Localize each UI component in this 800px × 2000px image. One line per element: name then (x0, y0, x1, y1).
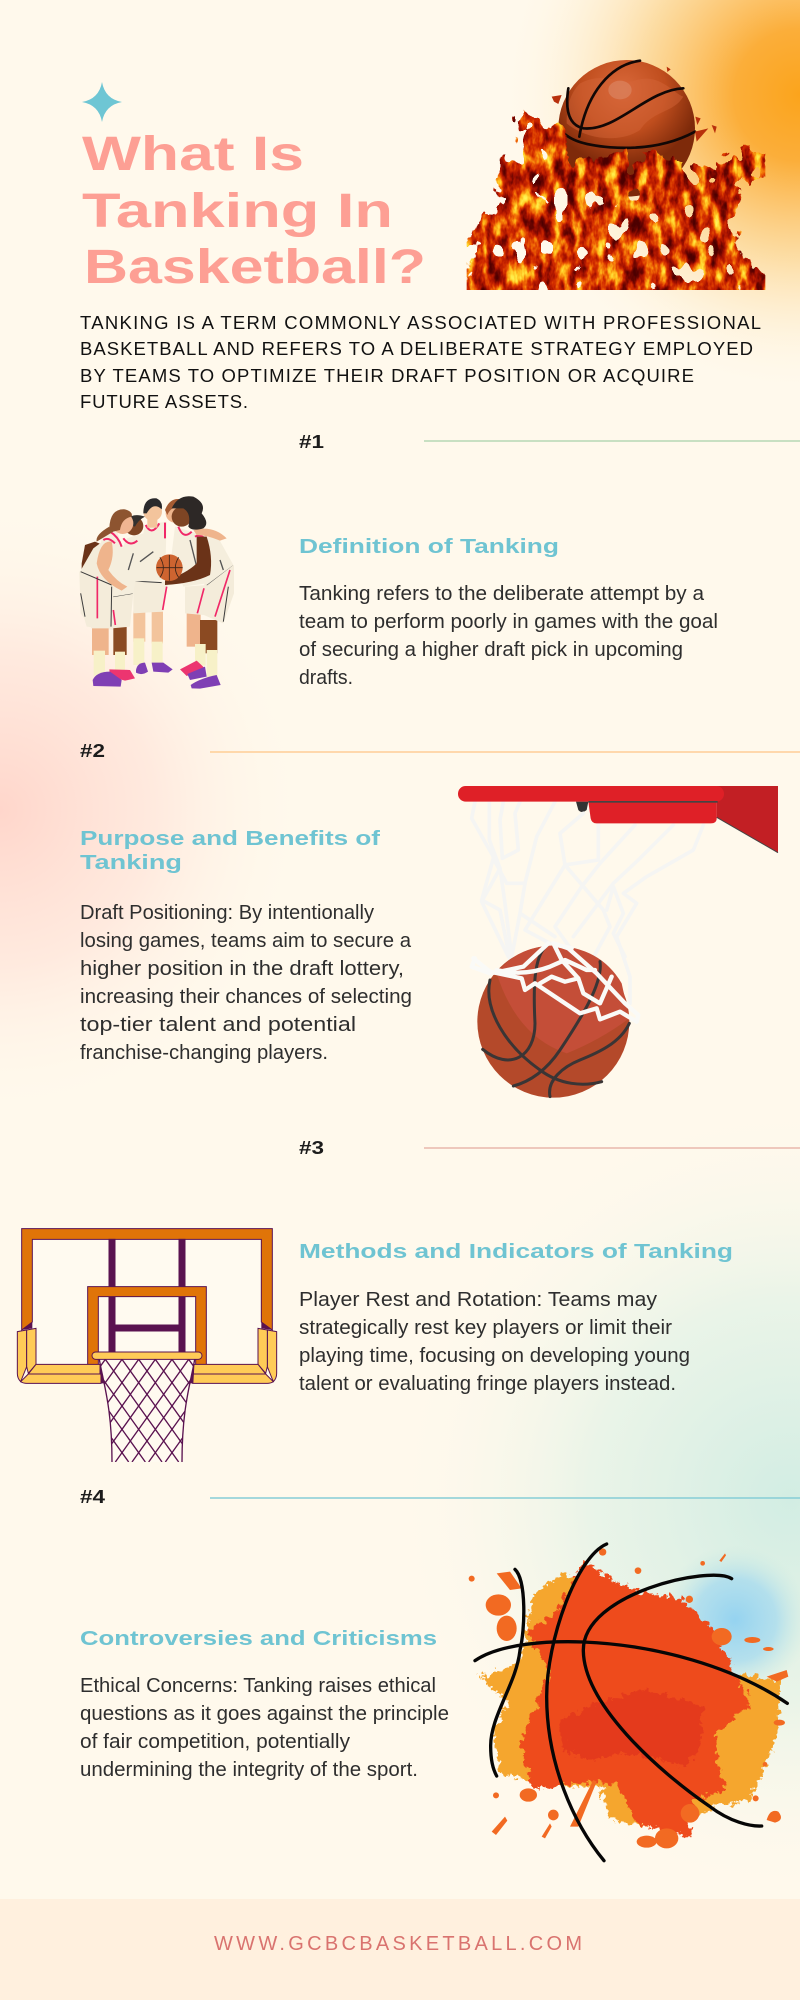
section number 4: #4 (80, 1487, 105, 1507)
icon: sparkle (82, 82, 122, 122)
panel: methods and indicators (17, 1138, 800, 1462)
body text: talent or evaluating fringe players instead. (299, 1373, 676, 1395)
intro paragraph: BASKETBALL AND REFERS TO A DELIBERATE STRATEGY EMPLOYED (80, 338, 753, 359)
panel: controversies and criticisms (80, 1487, 800, 1861)
illustration: backboard and net (17, 1229, 277, 1462)
illustration: ball dropping through hoop (458, 786, 778, 1098)
flames (460, 110, 773, 300)
section number 2: #2 (80, 741, 105, 761)
legs (92, 612, 217, 655)
body text: questions as it goes against the principle (80, 1703, 449, 1725)
body text: playing time, focusing on developing young (299, 1345, 690, 1367)
body text: Draft Positioning: By intentionally (80, 902, 374, 924)
body text (299, 1289, 690, 1395)
body text: Tanking refers to the deliberate attempt by a (299, 583, 705, 605)
orange splatter (520, 1560, 750, 1837)
body text (80, 902, 412, 1064)
illustration: paint splatter basketball (469, 1544, 788, 1861)
dark center (560, 1690, 703, 1767)
heading: Methods and Indicators of Tanking (299, 1241, 733, 1263)
jerseys (97, 522, 233, 597)
body text: Player Rest and Rotation: Teams may (299, 1289, 657, 1311)
seams (475, 1544, 787, 1861)
body text: drafts. (299, 667, 353, 689)
basketball (558, 60, 695, 197)
socks (94, 638, 217, 678)
title: Basketball? (84, 241, 426, 294)
orange blobs (469, 1548, 788, 1848)
body text (299, 583, 718, 689)
panel: purpose and benefits (80, 741, 800, 1098)
section number 3: #3 (299, 1138, 324, 1158)
body text (80, 1675, 449, 1781)
body text: higher position in the draft lottery, (80, 958, 404, 980)
body text: team to perform poorly in games with the goal (299, 611, 718, 633)
footer band (0, 1899, 800, 2000)
arms (97, 542, 127, 591)
frame padding (17, 1328, 277, 1383)
back player arm and body (82, 542, 107, 572)
ball (477, 946, 629, 1098)
heading: Tanking (80, 852, 182, 874)
title (82, 128, 426, 294)
body text: of fair competition, potentially (80, 1731, 350, 1753)
intro paragraph: BY TEAMS TO OPTIMIZE THEIR DRAFT POSITION OR ACQUIRE (80, 365, 694, 386)
body text: losing games, teams aim to secure a (80, 930, 412, 952)
backboard support (576, 786, 778, 853)
title: Tanking In (82, 185, 393, 238)
body text: undermining the integrity of the sport. (80, 1759, 418, 1781)
intro paragraph (80, 312, 761, 412)
title: What Is (82, 128, 304, 181)
panel: definition of tanking (79, 432, 800, 689)
basketball (156, 554, 183, 581)
body text: Ethical Concerns: Tanking raises ethical (80, 1675, 436, 1697)
intro paragraph: FUTURE ASSETS. (80, 391, 248, 412)
heading: Definition of Tanking (299, 536, 559, 558)
shoes (93, 661, 221, 689)
body text: top-tier talent and potential (80, 1014, 356, 1036)
shorts (79, 565, 234, 628)
intro paragraph: TANKING IS A TERM COMMONLY ASSOCIATED WITH PROFESSIONAL (80, 312, 761, 333)
heading: Controversies and Criticisms (80, 1628, 437, 1650)
website url: WWW.GCBCBASKETBALL.COM (214, 1933, 582, 1955)
illustration: flaming basketball (460, 60, 773, 300)
rim (458, 786, 724, 823)
body text: franchise-changing players. (80, 1042, 328, 1064)
back net (472, 802, 703, 1003)
heads (96, 496, 206, 542)
backboard (22, 1229, 272, 1365)
front net (472, 943, 638, 1022)
body text: strategically rest key players or limit their (299, 1317, 672, 1339)
body text: of securing a higher draft pick in upcoming (299, 639, 683, 661)
rim (92, 1352, 202, 1359)
heading (80, 828, 380, 874)
illustration: team huddle (79, 496, 234, 689)
section number 1: #1 (299, 432, 324, 452)
yellow splatter (480, 1572, 780, 1827)
body text: increasing their chances of selecting (80, 986, 412, 1008)
embers (552, 67, 717, 142)
heading: Purpose and Benefits of (80, 828, 380, 850)
net (98, 1360, 196, 1462)
